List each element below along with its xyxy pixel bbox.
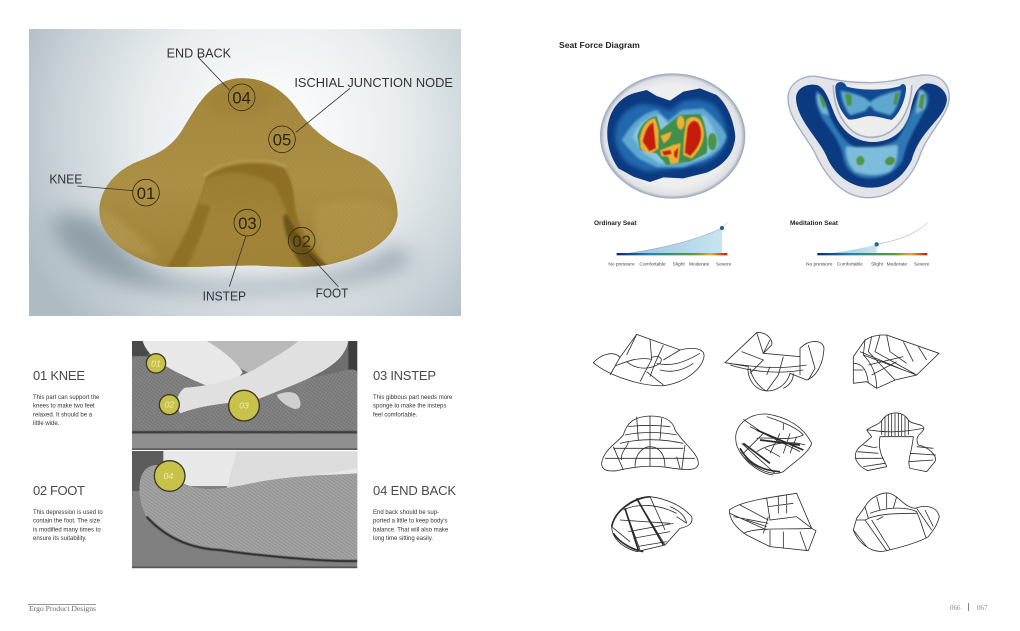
footer: page number left: 066 <box>950 604 961 612</box>
chart: meditation seat heat map <box>788 75 949 198</box>
panel: black and white usage photos: 04 <box>164 471 173 481</box>
callout labels: ISCHIAL JUNCTION NODE <box>294 75 453 90</box>
text: instep description: feel comfortable. <box>373 412 418 418</box>
text: end back description: long time sitting easily. <box>373 536 433 542</box>
panel: black and white usage photos: 03 <box>239 401 249 411</box>
footer: book title: Ergo Product Designs <box>29 604 96 613</box>
callout labels: FOOT <box>316 286 348 301</box>
panel: wireframe seat models <box>593 333 939 552</box>
chart: meditation seat scale: Slight <box>871 261 884 267</box>
wireframe 1 <box>593 334 704 386</box>
panel: black and white usage photos <box>132 341 357 568</box>
panel: labelled seat photo: 01 <box>137 184 155 203</box>
chart: ordinary seat scale: Comfortable <box>639 261 666 267</box>
panel: labelled seat photo <box>29 29 461 316</box>
chart: ordinary seat scale: Moderate <box>689 261 710 267</box>
chart: ordinary seat heat map <box>600 73 745 199</box>
callout labels <box>49 45 453 304</box>
text: end back description: ported a little to keep body's <box>373 519 448 525</box>
text: end back description: balance. That will also make <box>373 527 449 533</box>
chart: meditation seat scale: Comfortable <box>837 261 863 267</box>
yellow markers <box>146 354 259 491</box>
heading: 01 knee: 01 KNEE <box>33 368 85 383</box>
numbered markers <box>133 84 315 254</box>
chart: ordinary seat scale: Severe <box>716 261 732 267</box>
panel: labelled seat photo: 02 <box>292 232 311 251</box>
panel: black and white usage photos: 02 <box>165 400 174 410</box>
chart: meditation seat scale: No pressure <box>806 261 833 267</box>
panel: part descriptions left <box>33 368 103 542</box>
footer: page number right: 067 <box>977 604 988 612</box>
photo background <box>29 29 461 316</box>
wireframe 2 <box>725 333 824 391</box>
text: end back description: End back should be sup- <box>373 510 439 516</box>
text: knee description: little wide. <box>33 421 60 427</box>
photo: seat side view <box>132 451 357 568</box>
chart: meditation seat scale: Moderate <box>887 261 907 267</box>
heading: 03 instep: 03 INSTEP <box>373 368 436 383</box>
panel: black and white usage photos: 01 <box>151 358 161 368</box>
text: foot description: contain the foot. The size <box>33 519 101 525</box>
text: knee description: relaxed. It should be a <box>33 412 93 418</box>
text: foot description: This depression is used to <box>33 510 103 516</box>
heading: 04 end back: 04 END BACK <box>373 483 456 498</box>
chart: meditation seat scale <box>790 220 930 267</box>
leader lines <box>77 57 350 287</box>
chart: ordinary seat scale: No pressure <box>608 261 635 267</box>
text: foot description: is modified many times to <box>33 527 101 533</box>
heading: seat force diagram: Seat Force Diagram <box>559 40 640 50</box>
wireframe 7 <box>612 497 692 552</box>
photo: crossed legs <box>132 341 357 450</box>
text: instep description: This gibbous part needs more <box>373 395 453 401</box>
wireframe 8 <box>729 493 816 551</box>
panel: part descriptions right <box>373 368 456 542</box>
panel: labelled seat photo: 03 <box>238 214 257 233</box>
wireframe 4 <box>602 416 698 471</box>
text: knee description: knees to make two feet <box>33 404 95 410</box>
callout labels: INSTEP <box>203 289 246 304</box>
text: instep description: sponge to make the insteps <box>373 404 446 410</box>
heading: 02 foot: 02 FOOT <box>33 483 85 498</box>
label: Ordinary Seat <box>594 220 637 227</box>
panel: labelled seat photo: 05 <box>273 131 291 150</box>
chart: meditation seat scale: Severe <box>914 261 930 267</box>
chart: ordinary seat scale: Slight <box>673 261 685 267</box>
text: foot description: ensure its suitability. <box>33 536 87 542</box>
wireframe 6 <box>855 413 936 472</box>
callout labels: KNEE <box>49 172 82 187</box>
label: Meditation Seat <box>790 220 839 227</box>
chart: ordinary seat scale <box>594 220 732 267</box>
wireframe 9 <box>853 493 939 551</box>
text: knee description: This part can support the <box>33 395 100 401</box>
callout labels: END BACK <box>167 45 231 60</box>
panel: labelled seat photo: 04 <box>232 89 251 108</box>
wireframe 3 <box>853 335 939 388</box>
wireframe 5 <box>736 414 812 475</box>
seat cushion <box>99 78 398 267</box>
